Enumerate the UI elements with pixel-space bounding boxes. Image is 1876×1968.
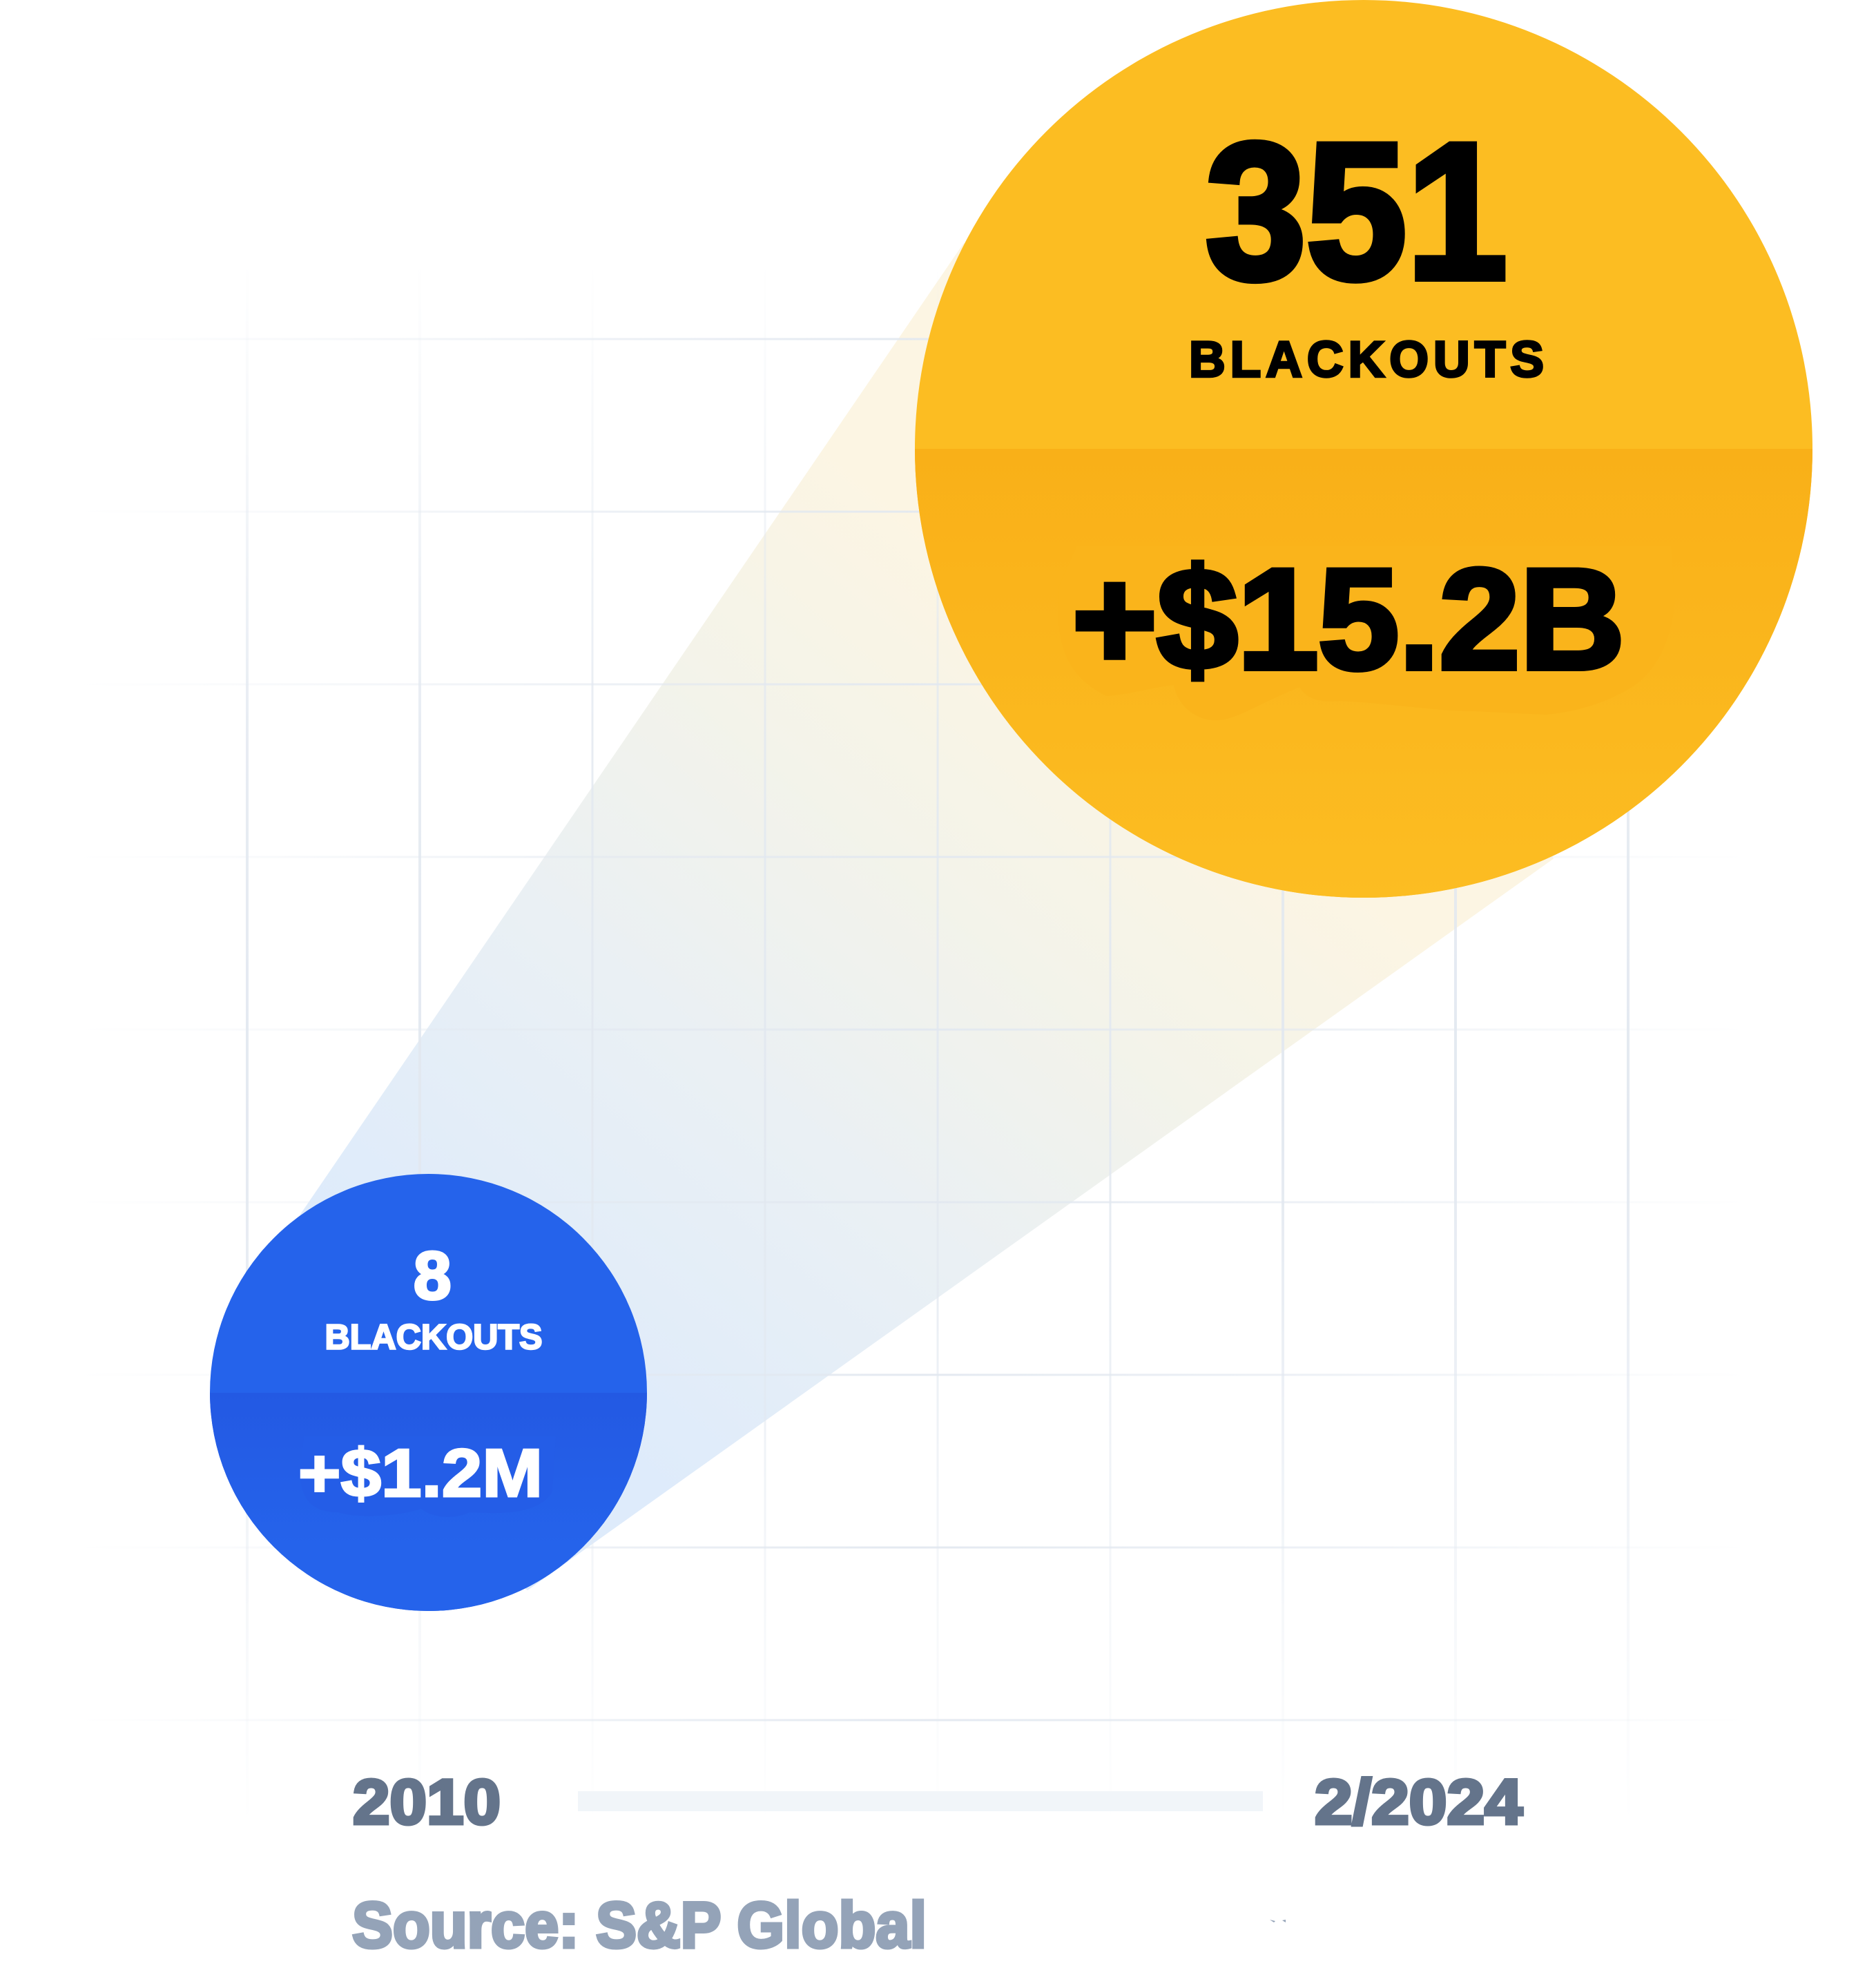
highlight blotch behind value [1058, 546, 1674, 720]
circle upper half [915, 0, 1812, 898]
source note: Source: S&P Global [352, 1889, 927, 1961]
label: blackouts: BLACKOUTS [325, 1318, 543, 1356]
background grid [76, 262, 1747, 1823]
label: blackouts: BLACKOUTS [1189, 331, 1544, 388]
highlight blotch behind value [300, 1436, 556, 1517]
number: 351: 351 [1206, 103, 1507, 320]
circle lower half [915, 449, 1812, 898]
timeline bar [578, 1791, 1263, 1811]
value: +$15.2B: +$15.2B [1072, 539, 1625, 699]
circle lower half [210, 1393, 647, 1611]
timeline axis [353, 1767, 1522, 1837]
funnel connecting small circle to big circle [300, 138, 1554, 1590]
end date label: 2/2024 [1315, 1767, 1522, 1837]
circle upper half [210, 1174, 647, 1611]
small blue circle: 2010 [210, 1174, 647, 1611]
value: +$1.2M: +$1.2M [298, 1435, 543, 1511]
number: 8: 8 [414, 1237, 452, 1313]
start year label: 2010 [353, 1767, 501, 1837]
big yellow circle: 2/2024 [915, 0, 1812, 898]
